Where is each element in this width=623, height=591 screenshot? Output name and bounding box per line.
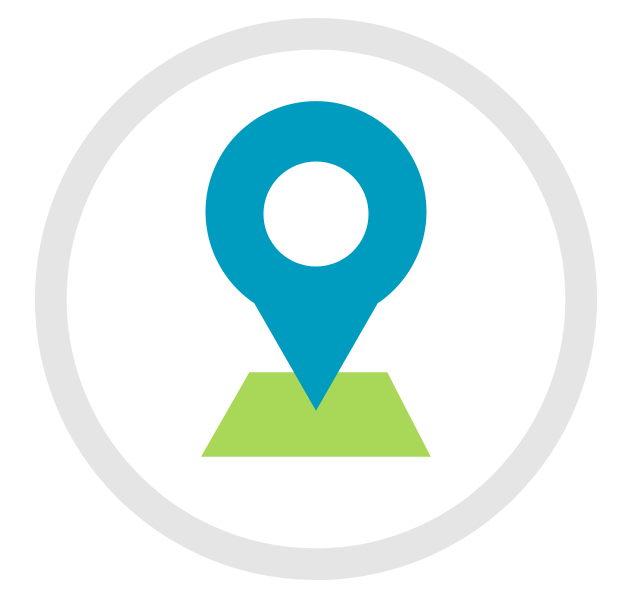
icon: green map base xyxy=(201,372,431,457)
icon: blue map pin xyxy=(206,101,427,411)
icon: grey outer ring xyxy=(51,34,581,564)
